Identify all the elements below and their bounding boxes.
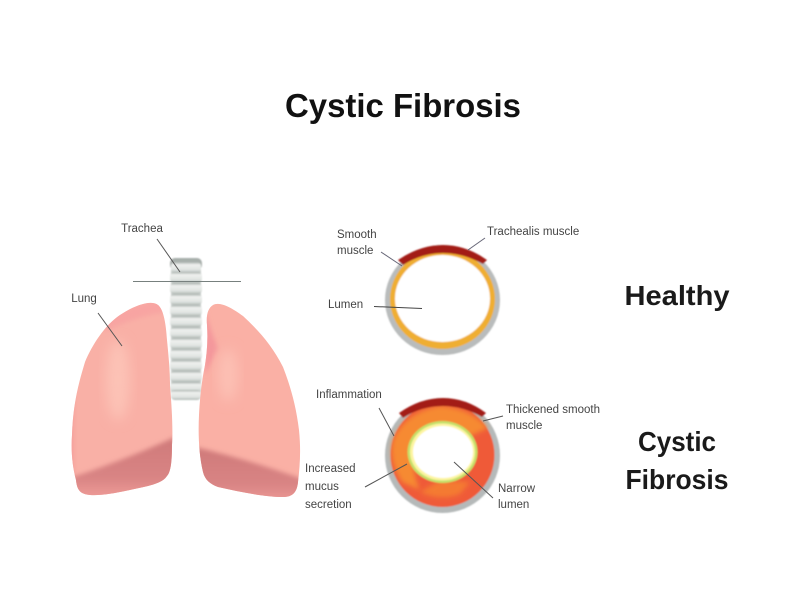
- label: trachea: [121, 223, 180, 272]
- healthy labels: [328, 226, 579, 311]
- cystic fibrosis airway cross-section: [385, 398, 500, 513]
- label: lung: [71, 293, 122, 346]
- heading: cystic fibrosis: [626, 426, 728, 495]
- heading: cystic fibrosis: Fibrosis: [626, 464, 728, 495]
- title: Cystic Fibrosis: [285, 88, 521, 125]
- left lung: [72, 302, 172, 496]
- healthy labels: Trachealis muscle: [487, 226, 579, 238]
- cystic fibrosis labels: lumen: [498, 499, 529, 511]
- cystic fibrosis labels: Increased: [305, 463, 356, 475]
- heading: healthy: Healthy: [624, 280, 730, 311]
- cystic fibrosis labels: [305, 389, 600, 511]
- healthy labels: Lumen: [328, 299, 363, 311]
- label: lung: Lung: [71, 293, 97, 305]
- cystic fibrosis labels: Thickened smooth: [506, 404, 600, 416]
- cystic fibrosis labels: secretion: [305, 499, 352, 511]
- healthy labels: Smooth: [337, 229, 377, 241]
- cystic fibrosis labels: muscle: [506, 420, 542, 432]
- right lung: [198, 304, 300, 497]
- label: trachea: Trachea: [121, 223, 163, 235]
- trachea: [170, 258, 202, 400]
- cystic fibrosis labels: Inflammation: [316, 389, 382, 401]
- cystic fibrosis labels: mucus: [305, 481, 339, 493]
- healthy airway cross-section: [385, 245, 500, 355]
- infographic canvas: [72, 93, 730, 514]
- cut line: [133, 280, 241, 282]
- healthy labels: muscle: [337, 245, 373, 257]
- lungs illustration: [72, 257, 300, 497]
- heading: cystic fibrosis: Cystic: [638, 426, 716, 457]
- cystic fibrosis labels: Narrow: [498, 483, 536, 495]
